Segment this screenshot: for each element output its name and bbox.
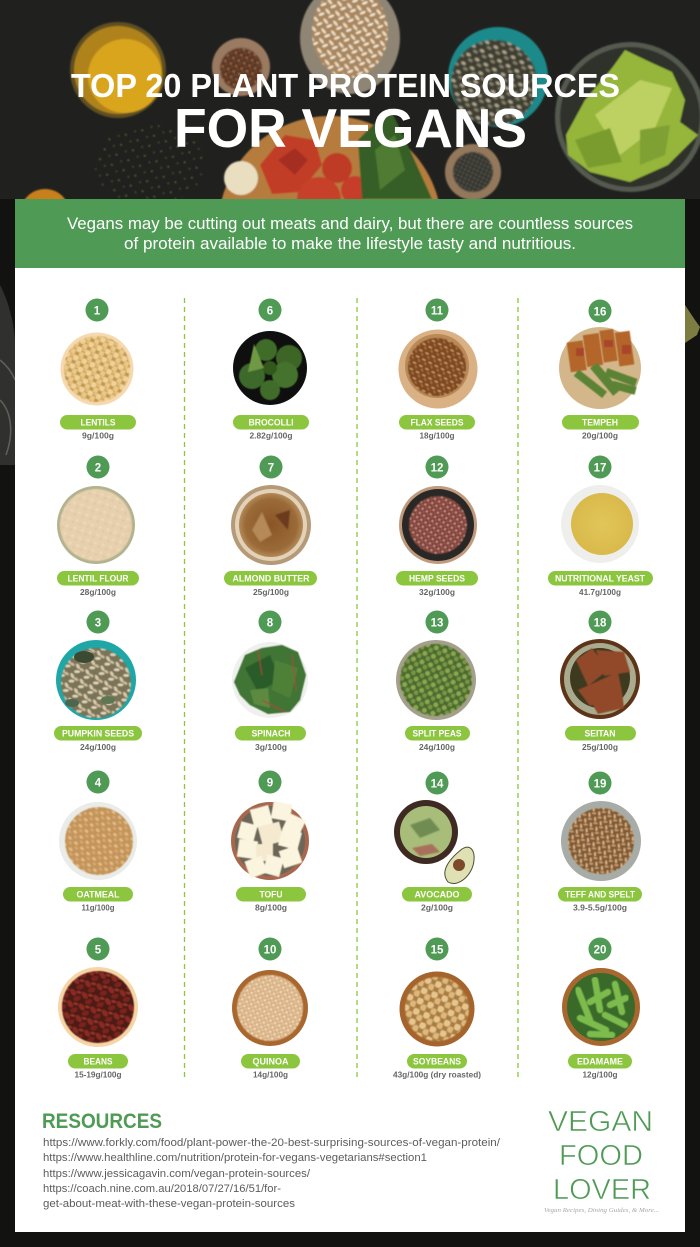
item 1: lentils [60,298,136,440]
item 2: lentil flour: 28g/100g [80,588,116,597]
item 2: lentil flour: 2 [95,462,101,474]
item 15: soybeans: 15 [431,944,444,956]
item 3: pumpkin seeds: 3 [95,618,101,630]
item 9: tofu [231,770,309,912]
item 5: beans [58,938,138,1080]
item 16: tempeh: TEMPEH [582,418,618,428]
resources links: get-about-meat-with-these-vegan-protein-sources [43,1198,296,1210]
item 1: lentils: 9g/100g [82,432,114,440]
item 19: teff and spelt: 3.9-5.5g/100g [573,904,627,912]
item 20: edamame: 20 [594,944,606,956]
hero food photo [0,0,700,199]
item 10: quinoa: 10 [264,944,276,956]
item 3: pumpkin seeds [54,610,142,752]
item 3: pumpkin seeds: 24g/100g [80,743,116,752]
item 1: lentils: 1 [94,306,101,318]
panel: white content card [15,268,685,1232]
logo: Vegan Food Lover: LOVER [553,1174,651,1206]
item 12: hemp seeds: HEMP SEEDS [409,574,465,584]
item 13: split peas [396,610,476,752]
item 15: soybeans: SOYBEANS [413,1056,461,1068]
resources links [43,1137,501,1210]
item 7: almond butter: 25g/100g [253,588,289,597]
item 12: hemp seeds: 12 [431,462,443,474]
item 10: quinoa: QUINOA [252,1056,289,1068]
item 6: broccoli: 6 [267,306,273,318]
item 19: teff and spelt: 19 [594,778,606,790]
item 14: avocado: 2g/100g [421,904,453,912]
item 13: split peas: SPLIT PEAS [412,728,462,740]
item 11: flax seeds: 18g/100g [420,432,455,440]
item 14: avocado [394,772,474,912]
resources heading: RESOURCES [42,1110,162,1133]
item 17: nutritional yeast: 17 [594,462,606,474]
item 3: pumpkin seeds: PUMPKIN SEEDS [62,728,134,740]
logo: Vegan Food Lover: VEGAN [548,1106,653,1138]
item 5: beans: 15-19g/100g [74,1070,122,1080]
intro banner: Vegans may be cutting out meats and dairy, but there are countless sources [67,215,633,233]
resources links: https://www.healthline.com/nutrition/protein-for-vegans-vegetarians#section1 [43,1152,427,1164]
item 4: oatmeal: OATMEAL [76,890,120,900]
logo: Vegan Food Lover: Vegan Recipes, Dining Guides, & More... [544,1207,659,1214]
item 8: spinach: SPINACH [252,728,291,740]
item 19: teff and spelt: TEFF AND SPELT [565,890,635,900]
item 11: flax seeds [398,298,478,440]
item 8: spinach: 8 [267,618,274,630]
left edge textile scrap [0,285,15,465]
item 18: seitan: SEITAN [584,728,616,740]
item 17: nutritional yeast [548,456,653,597]
item 7: almond butter [224,456,317,597]
item 15: soybeans [393,938,481,1080]
title: FOR VEGANS [174,97,527,159]
item 20: edamame: EDAMAME [577,1056,623,1068]
item 18: seitan: 18 [594,618,607,630]
item 14: avocado: 14 [431,778,444,790]
item 10: quinoa [232,938,308,1080]
item 8: spinach: 3g/100g [255,743,287,752]
logo: Vegan Food Lover [544,1106,659,1214]
item 19: teff and spelt [558,772,642,912]
item 11: flax seeds: FLAX SEEDS [410,418,464,428]
intro banner: of protein available to make the lifestyle tasty and nutritious. [124,235,576,253]
item 5: beans: 5 [95,944,102,956]
item 4: oatmeal [59,770,137,912]
title: TOP 20 PLANT PROTEIN SOURCES [71,67,620,104]
item 17: nutritional yeast: 41.7g/100g [579,588,621,597]
intro banner [15,199,685,268]
item 13: split peas: 13 [431,618,443,630]
item 9: tofu: 8g/100g [255,904,287,912]
item 20: edamame: 12g/100g [582,1070,618,1080]
item 6: broccoli [233,298,309,440]
item 18: seitan [560,610,640,752]
item 14: avocado: AVOCADO [414,890,460,900]
item 9: tofu: 9 [267,778,273,790]
item 6: broccoli: 2.82g/100g [250,432,293,440]
item 4: oatmeal: 11g/100g [82,904,115,912]
item 16: tempeh [559,300,641,440]
item 17: nutritional yeast: NUTRITIONAL YEAST [555,574,645,584]
logo: Vegan Food Lover: FOOD [559,1140,643,1172]
item 11: flax seeds: 11 [431,306,444,318]
item 12: hemp seeds: 32g/100g [419,588,455,597]
item 5: beans: BEANS [84,1056,112,1068]
item 4: oatmeal: 4 [95,778,102,790]
item 2: lentil flour: LENTIL FLOUR [68,574,129,584]
item 16: tempeh: 20g/100g [582,432,618,440]
resources links: https://coach.nine.com.au/2018/07/27/16/51/for- [43,1183,281,1195]
item 13: split peas: 24g/100g [419,743,455,752]
item 6: broccoli: BROCOLLI [248,418,294,428]
item 1: lentils: LENTILS [80,418,116,428]
item 15: soybeans: 43g/100g (dry roasted) [393,1070,481,1080]
item 10: quinoa: 14g/100g [253,1070,288,1080]
item 2: lentil flour [57,456,139,597]
item 20: edamame [562,938,640,1080]
item 8: spinach [232,610,308,752]
item 12: hemp seeds [396,456,478,597]
item 9: tofu: TOFU [260,890,283,900]
item 16: tempeh: 16 [594,306,606,318]
resources links: https://www.jessicagavin.com/vegan-protein-sources/ [43,1168,311,1180]
resources links: https://www.forkly.com/food/plant-power-the-20-best-surprising-sources-of-vegan-protein/ [43,1137,501,1149]
item 7: almond butter: 7 [268,462,274,474]
item 18: seitan: 25g/100g [582,743,618,752]
item 7: almond butter: ALMOND BUTTER [232,574,310,584]
right edge scrap [685,305,700,343]
title [71,67,620,159]
